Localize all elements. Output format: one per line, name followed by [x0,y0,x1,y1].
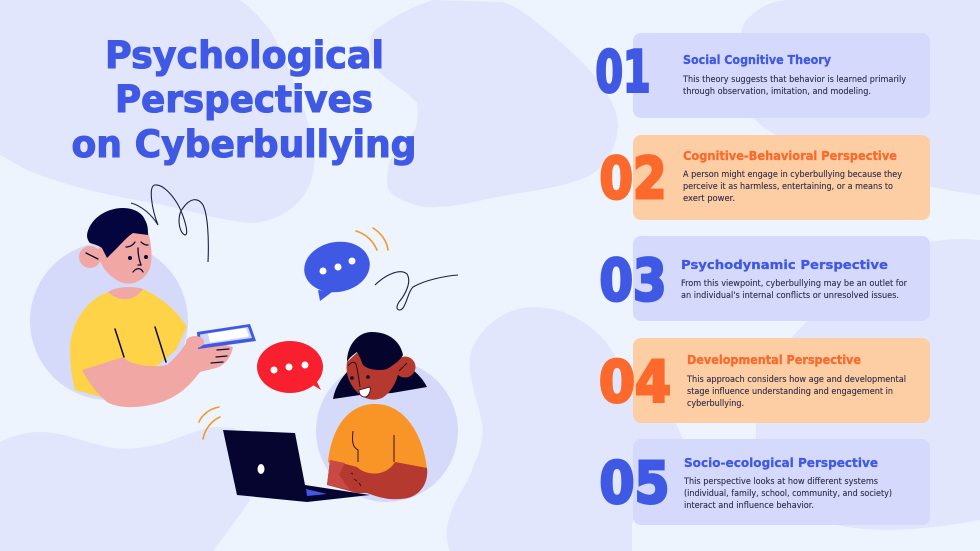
icon: orange signal arcs left [199,407,220,439]
body 04 [686,374,906,409]
squiggle above boy [131,185,208,262]
number 04: 04 [599,350,671,416]
heading 02: Cognitive-Behavioral Perspective [683,148,897,163]
body 05: interact and influence behavior. [684,500,814,511]
icon: phone [197,324,256,349]
body 01: through observation, imitation, and modeling. [683,86,871,97]
body 05: (individual, family, school, community, and society) [684,488,892,499]
body 04: stage influence understanding and engagement in [687,386,893,397]
card 01 [596,33,930,118]
icon: laptop [223,430,370,502]
body 02 [683,169,902,204]
illustration: girl with laptop [223,332,458,502]
body 05 [683,476,892,511]
body 04: This approach considers how age and developmental [686,374,906,385]
heading 01: Social Cognitive Theory [683,52,831,67]
card 05 [600,439,930,525]
number 03: 03 [600,248,666,314]
body 02: exert power. [683,193,735,204]
title: Psychological [105,33,384,77]
icon: orange signal arcs top [356,228,388,250]
title: on Cyberbullying [72,122,416,166]
illustration: boy with phone [30,208,256,407]
body 05: This perspective looks at how different systems [683,476,878,487]
icon: blue speech bubble [300,237,374,301]
body 02: perceive it as harmless, entertaining, or a means to [683,181,893,192]
number 02: 02 [600,146,666,212]
body 03: an individual's internal conflicts or unresolved issues. [681,290,899,301]
body 02: A person might engage in cyberbullying because they [683,169,902,180]
card 02 [600,135,930,220]
heading 05: Socio-ecological Perspective [684,455,878,470]
body 01: This theory suggests that behavior is learned primarily [682,74,906,85]
body 03: From this viewpoint, cyberbullying may be an outlet for [681,278,907,289]
title: Perspectives [115,77,373,121]
card 03 [600,236,930,321]
body 01 [682,74,906,97]
body 04: cyberbullying. [687,398,744,409]
heading 03: Psychodynamic Perspective [681,257,888,272]
body 03 [681,278,907,301]
title [72,33,416,166]
heading 04: Developmental Perspective [687,352,861,367]
icon: red speech bubble [257,341,323,393]
number 05: 05 [600,450,670,516]
card 04 [599,338,930,423]
squiggle right of bubble [375,272,458,310]
number 01: 01 [596,40,650,106]
